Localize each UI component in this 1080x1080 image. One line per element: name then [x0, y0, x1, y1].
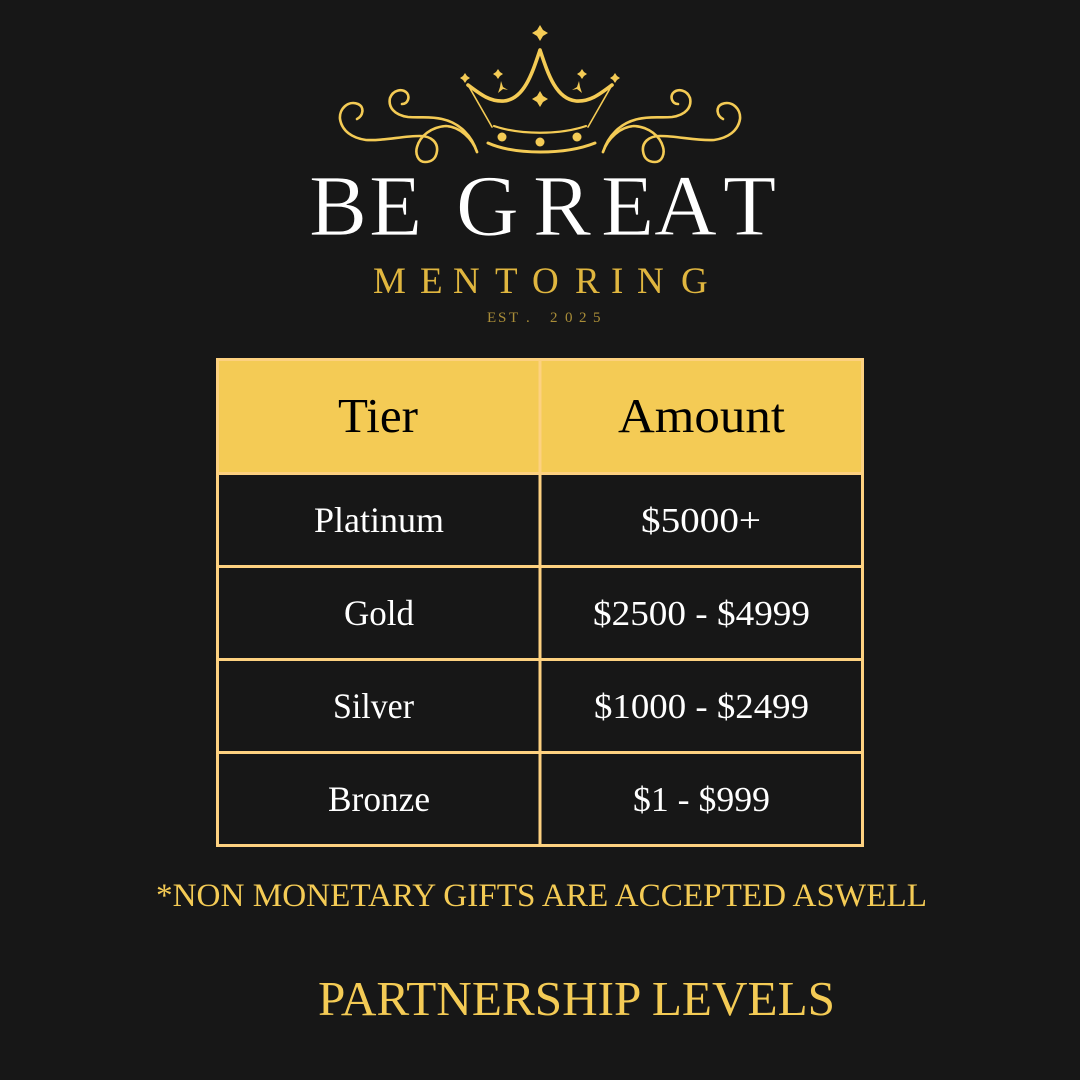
- header: Tier: Tier: [338, 388, 418, 443]
- icon: crown jewels and stars: [460, 25, 620, 146]
- table header background: [218, 360, 862, 474]
- row: Platinum: Platinum: [314, 500, 444, 540]
- table: partnership tiers: [218, 360, 862, 846]
- row: Platinum: $5000+: [641, 501, 761, 540]
- row: Silver: Silver: [333, 686, 414, 726]
- row: Platinum: [314, 500, 761, 540]
- row: Silver: [333, 686, 809, 726]
- row: Bronze: $1 - $999: [633, 780, 770, 819]
- icon: left flourish: [340, 90, 477, 162]
- row: Gold: [344, 593, 810, 633]
- header: Amount: Amount: [618, 388, 785, 443]
- brand name: BE GREAT: BE GREAT: [309, 157, 776, 254]
- icon: crown outline: [468, 50, 612, 152]
- row: Silver: $1000 - $2499: [594, 687, 809, 726]
- footnote: *NON MONETARY GIFTS ARE ACCEPTED ASWELL: [156, 878, 927, 914]
- row: Gold: $2500 - $4999: [593, 594, 810, 633]
- table grid: [218, 360, 862, 846]
- logo: crown with flourishes: [340, 25, 740, 162]
- row: Bronze: [328, 779, 770, 819]
- row: Gold: Gold: [344, 593, 414, 633]
- established date: EST. 2025: [487, 310, 600, 326]
- icon: right flourish: [603, 90, 740, 162]
- brand subtitle: MENTORING: MENTORING: [373, 261, 708, 302]
- row: Bronze: Bronze: [328, 779, 430, 819]
- title: partnership levels: PARTNERSHIP LEVELS: [318, 971, 835, 1026]
